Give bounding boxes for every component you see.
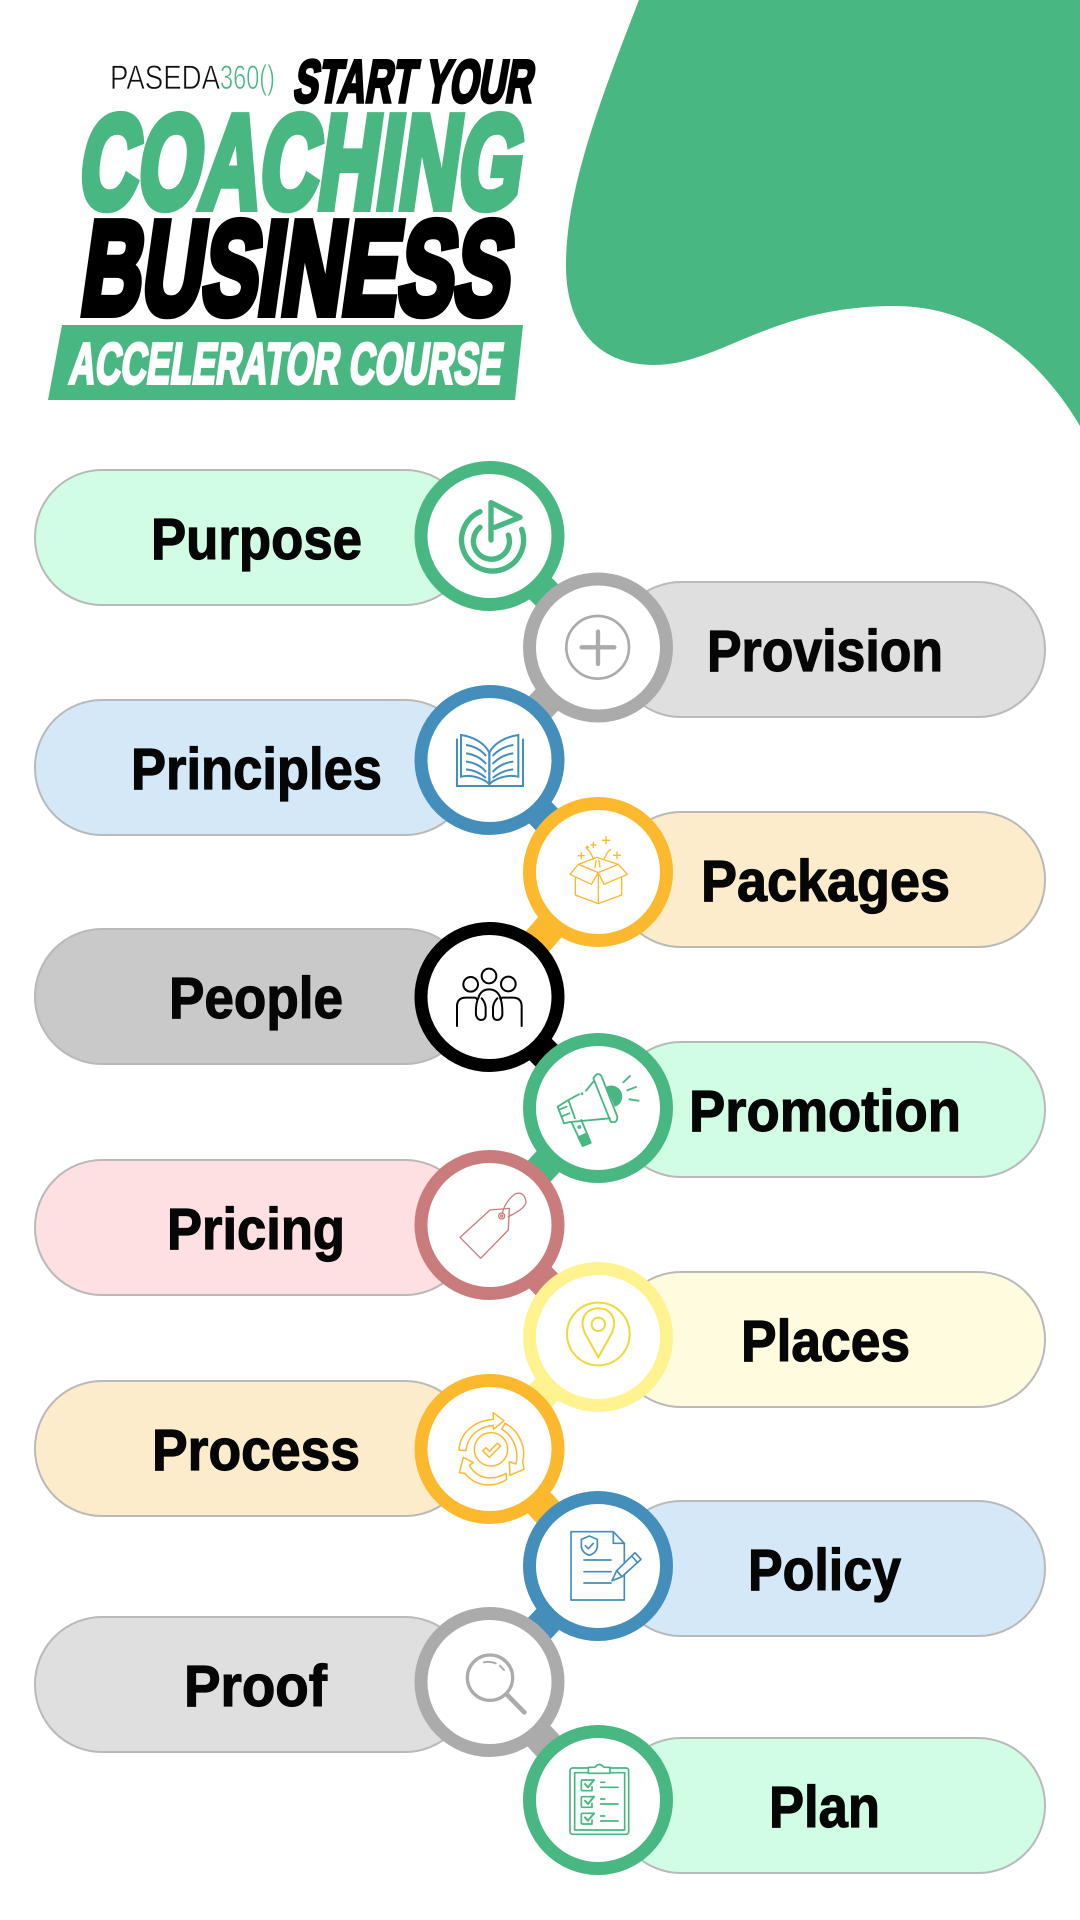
pill: Principles: Principles [131, 737, 382, 802]
pill: Purpose [35, 470, 472, 605]
logo: PASEDA360: PASEDA [110, 59, 220, 97]
pill: Plan: Plan [769, 1775, 880, 1840]
node: Promotion megaphone icon [530, 1040, 666, 1176]
node: Process cycle check icon [421, 1380, 558, 1518]
heading: START YOUR: START YOUR [290, 47, 541, 115]
heading: BUSINESS: BUSINESS [74, 195, 524, 342]
node: Places map pin icon [530, 1268, 666, 1406]
node: Purpose target flag icon [421, 468, 558, 604]
pill: Packages [614, 812, 1045, 947]
pill: Principles [35, 700, 472, 835]
pill: Provision [614, 582, 1045, 717]
pill: Proof: Proof [184, 1654, 328, 1719]
pill: Promotion: Promotion [689, 1079, 961, 1144]
node: Pricing tag icon [421, 1156, 558, 1294]
header title block [48, 47, 541, 400]
node: Provision plus icon [530, 579, 666, 716]
heading: COACHING: COACHING [72, 89, 535, 236]
banner: ACCELERATOR COURSE: ACCELERATOR COURSE [66, 332, 507, 396]
banner: ACCELERATOR COURSE [48, 325, 523, 400]
node: People group icon [421, 928, 558, 1066]
node: Packages gift box icon [530, 804, 666, 940]
pill: Proof [35, 1617, 472, 1752]
pill: Packages: Packages [701, 849, 950, 914]
logo: PASEDA360: 360() [220, 59, 275, 97]
pill: Process [35, 1381, 472, 1516]
pill: Promotion [614, 1042, 1045, 1177]
pill: Pricing [35, 1160, 472, 1295]
pill: Places [614, 1272, 1045, 1407]
pill: Places: Places [741, 1309, 910, 1374]
pill: Policy: Policy [748, 1538, 901, 1603]
pill: Plan [614, 1738, 1045, 1873]
pill: Purpose: Purpose [151, 507, 362, 572]
background blob [566, 0, 1080, 426]
node: Proof magnifier icon [421, 1614, 558, 1750]
pill: People [35, 929, 472, 1064]
pill: Provision: Provision [707, 619, 943, 684]
pill: People: People [169, 966, 343, 1031]
pill: Process: Process [152, 1418, 360, 1483]
node: Principles book icon [421, 692, 558, 828]
node: Plan checklist icon [530, 1732, 666, 1868]
pill: Policy [614, 1501, 1045, 1636]
node: Policy document icon [530, 1498, 666, 1634]
pill: Pricing: Pricing [167, 1197, 345, 1262]
connector stems [489, 536, 598, 1800]
